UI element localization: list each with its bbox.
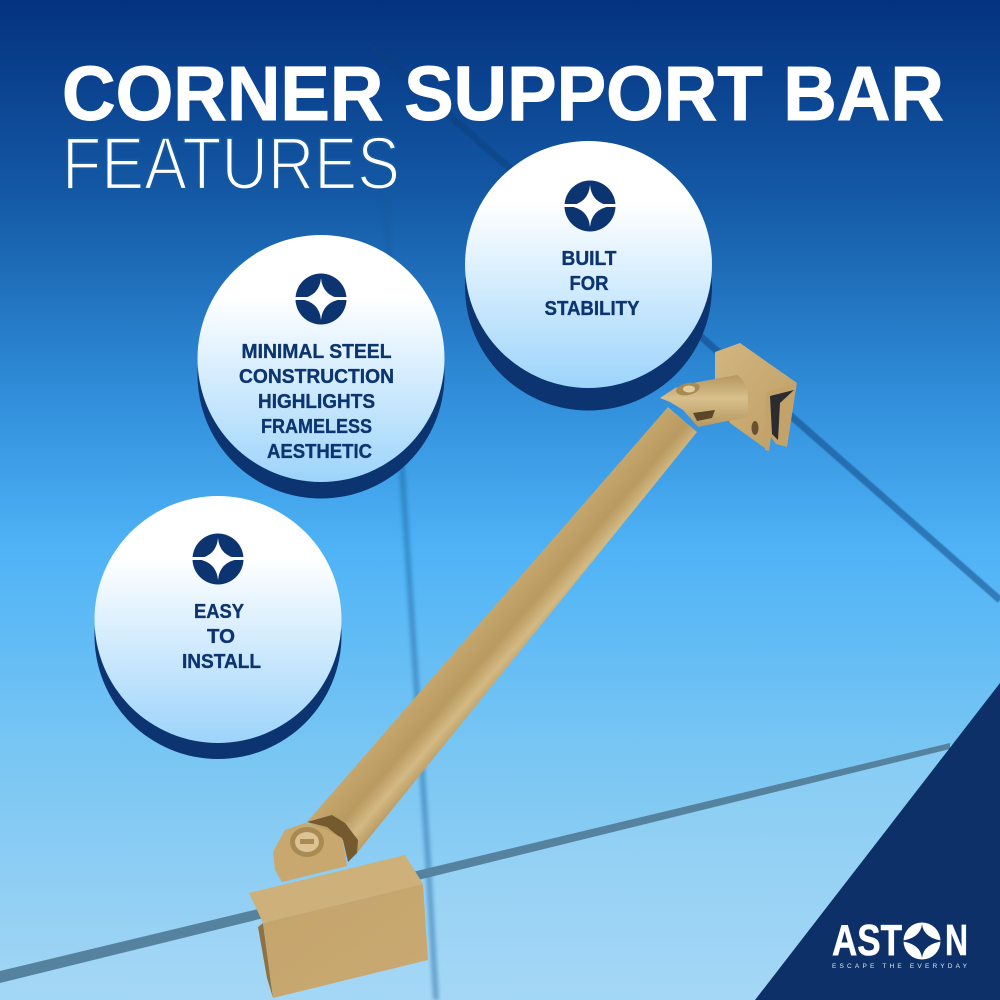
label — [182, 601, 261, 673]
subtitle: FEATURES — [62, 122, 400, 205]
feature circle: easy to install — [94, 496, 342, 759]
feature circle: built for stability — [465, 141, 712, 410]
label: TO — [207, 626, 235, 648]
title — [62, 51, 944, 205]
tube — [307, 407, 697, 853]
lower bracket — [249, 855, 428, 998]
label: FOR — [570, 273, 609, 295]
corner triangle — [755, 683, 1000, 1000]
feature circle: minimal steel construction — [198, 235, 444, 498]
label: CONSTRUCTION — [239, 366, 394, 388]
logo — [832, 916, 968, 970]
icon: star — [564, 180, 616, 232]
icon: star — [295, 274, 347, 324]
logo: N — [945, 916, 968, 965]
label: AESTHETIC — [267, 441, 372, 463]
logo: AST — [832, 916, 902, 965]
label: INSTALL — [182, 651, 261, 673]
label: MINIMAL STEEL — [242, 341, 392, 363]
label: EASY — [194, 601, 245, 623]
corner support bar — [249, 343, 797, 998]
icon: star — [192, 534, 244, 584]
label — [544, 248, 640, 320]
label: STABILITY — [544, 298, 640, 320]
upper joint and bracket — [660, 343, 797, 451]
logo: ESCAPE THE EVERYDAY — [832, 963, 968, 970]
label: FRAMELESS — [261, 416, 372, 438]
lower joint — [273, 815, 358, 882]
title: CORNER SUPPORT BAR — [62, 51, 944, 137]
label: BUILT — [562, 248, 616, 270]
glass panel lower — [0, 733, 1000, 1000]
label: HIGHLIGHTS — [258, 391, 375, 413]
label — [239, 341, 394, 463]
